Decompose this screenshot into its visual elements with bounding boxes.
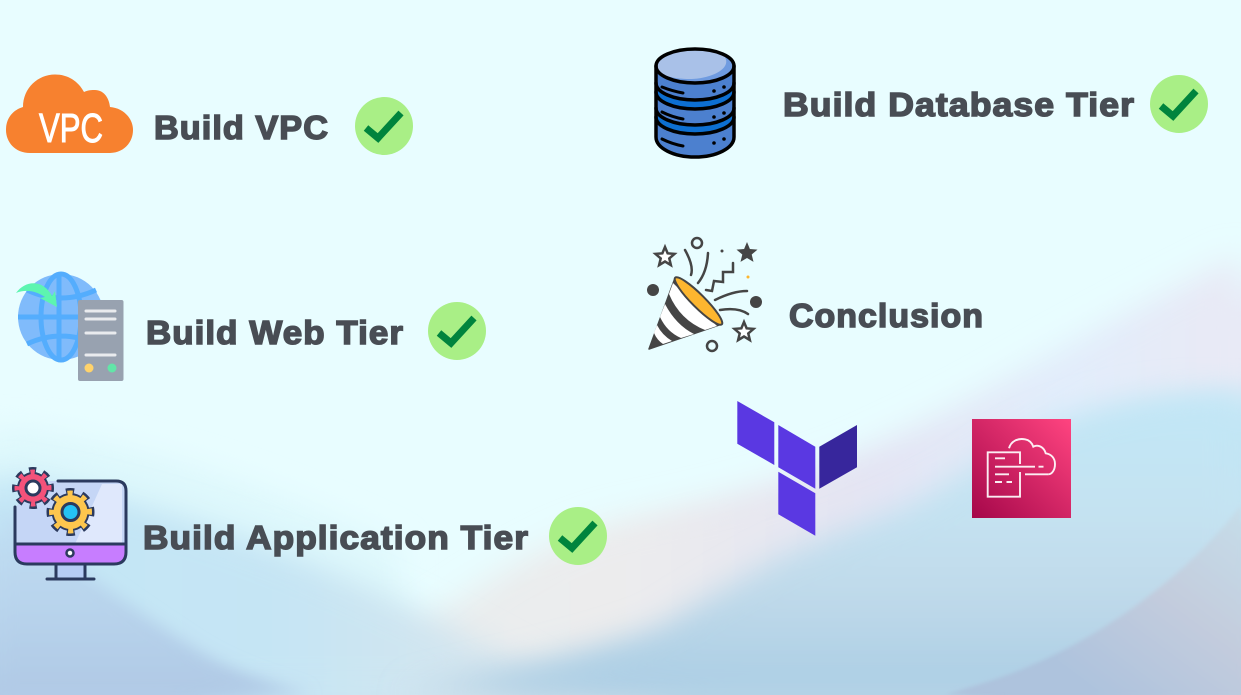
icon: AWS CloudFormation [972,419,1071,518]
heading: Build Application Tier: Build Application Tier [143,519,529,556]
icon: Terraform logo [737,401,857,536]
icon: check Application [549,507,607,565]
icon: application monitor with gears [15,471,126,579]
icon: party popper [647,238,762,351]
icon: VPC cloud [6,74,133,153]
icon: check Web [428,302,486,360]
heading: Build Web Tier: Build Web Tier [146,314,404,351]
icon: web server globe [16,274,124,381]
icon: VPC cloud: VPC [39,105,103,151]
icon: database [656,49,734,157]
icon: check Database [1150,75,1208,133]
heading: Conclusion: Conclusion [789,297,984,334]
icon: check VPC [355,97,413,155]
heading: Build Database Tier: Build Database Tier [783,86,1135,123]
heading: Build VPC: Build VPC [154,109,329,146]
